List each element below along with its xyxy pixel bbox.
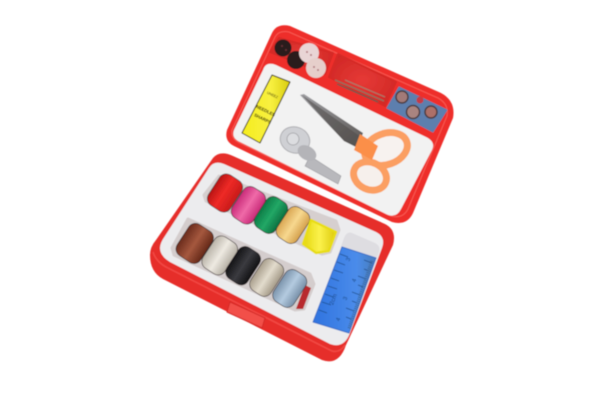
- front wall highlight: [153, 252, 345, 351]
- ruler numbers: 3: [346, 256, 353, 262]
- scissors: [300, 94, 412, 195]
- top thread well: [204, 176, 339, 254]
- bottom thread well: [172, 219, 314, 310]
- ruler numbers: 2cm: [329, 293, 339, 306]
- yellow thimble: [303, 220, 336, 253]
- lid: upper half of the case: [226, 25, 454, 223]
- latch: [227, 302, 265, 328]
- ruler well: [315, 233, 380, 333]
- ruler numbers: 4: [336, 316, 343, 322]
- scissor handles: [360, 127, 412, 171]
- case outer shell: [150, 153, 394, 361]
- compartment: buttons: [270, 38, 333, 78]
- scissor blades: [300, 94, 363, 148]
- case: lower half: [150, 153, 394, 361]
- white tray: [233, 64, 433, 216]
- needle pack labels: [253, 91, 279, 125]
- compartment: needles: [329, 54, 396, 106]
- compartment: snap fastener card: [387, 87, 447, 132]
- ruler ticks: [319, 254, 348, 313]
- top row thread spools: [204, 171, 313, 247]
- bottom row thread spools: [173, 220, 310, 310]
- needle pack labels: SHARPS: [253, 112, 272, 125]
- ruler numbers: 3: [343, 295, 350, 301]
- dark buttons: [274, 40, 305, 69]
- ruler numbers: [329, 256, 359, 322]
- needle pack labels: NEEDLES: [255, 104, 276, 117]
- needle threader: [276, 123, 341, 184]
- needle pack labels: UNEEZ: [266, 91, 279, 100]
- tape measure: [313, 247, 376, 333]
- needle pack: [242, 75, 290, 143]
- lid outer shell: [226, 25, 454, 223]
- white insert: [160, 163, 383, 345]
- pale buttons: [299, 43, 326, 78]
- lid inner rim: [232, 32, 447, 217]
- ruler numbers: 4: [352, 277, 359, 283]
